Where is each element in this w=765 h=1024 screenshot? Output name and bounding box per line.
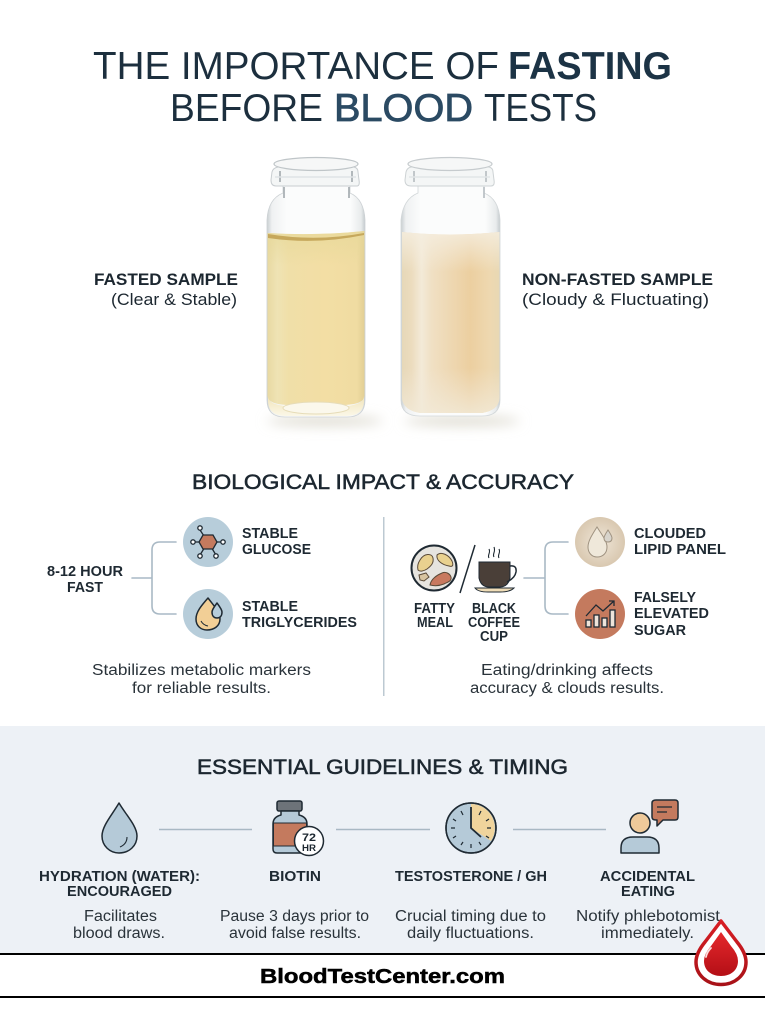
label: stable glucose <box>242 526 311 558</box>
label: black coffee cup: COFFEE <box>468 615 520 631</box>
label: fatty meal <box>414 601 455 631</box>
icon: biotin bottle: HR <box>302 843 316 854</box>
label: hydration: Facilitates <box>84 908 157 925</box>
logo: blood drop <box>696 921 746 984</box>
panel: essential guidelines <box>0 726 765 954</box>
label: accidental eating: Notify phlebotomist <box>576 908 721 925</box>
icon: black coffee cup <box>475 547 516 592</box>
label: fatty meal: MEAL <box>417 615 453 631</box>
text: stabilizes metabolic markers: Stabilizes metabolic markers <box>92 662 311 679</box>
label: hydration: ENCOURAGED <box>67 884 172 900</box>
icon: stable glucose <box>183 517 233 567</box>
label: 8-12 hour fast: 8-12 HOUR <box>47 564 124 580</box>
label: stable triglycerides <box>242 599 357 631</box>
icon: fatty meal plate <box>412 546 456 590</box>
label: fatty meal: FATTY <box>414 601 455 617</box>
label: fasted sample: (Clear & Stable) <box>111 291 237 309</box>
label: biotin <box>220 869 369 942</box>
connector: meal to outcomes <box>524 542 568 614</box>
title: THE IMPORTANCE OF <box>93 45 499 88</box>
label: stable triglycerides: TRIGLYCERIDES <box>242 615 357 631</box>
slash divider <box>460 545 475 593</box>
label: hydration <box>39 869 200 942</box>
label: 8-12 hour fast: FAST <box>67 580 103 596</box>
footer band: BloodTestCenter.com <box>260 966 505 988</box>
icon: person with speech bubble <box>621 800 678 853</box>
title: TESTS <box>484 87 597 130</box>
icon: falsely elevated sugar <box>575 589 625 639</box>
label: fasted sample: FASTED SAMPLE <box>94 271 238 289</box>
label: biotin: avoid false results. <box>229 925 361 942</box>
icon: water drop <box>102 803 137 853</box>
label: stable glucose: GLUCOSE <box>242 542 311 558</box>
label: accidental eating <box>576 869 721 942</box>
label: black coffee cup <box>468 601 520 645</box>
label: accidental eating: immediately. <box>601 925 694 942</box>
label: black coffee cup: BLACK <box>472 601 516 617</box>
label: biotin: Pause 3 days prior to <box>220 908 369 925</box>
label: non-fasted sample <box>522 271 713 309</box>
timeline connectors <box>159 828 606 830</box>
label: accidental eating: EATING <box>621 884 675 900</box>
label: falsely elevated sugar: FALSELY <box>634 590 696 606</box>
label: hydration: HYDRATION (WATER): <box>39 869 200 885</box>
label: testosterone and growth hormone: daily fluctuations. <box>407 925 534 942</box>
text: eating and drinking: Eating/drinking affects <box>481 662 653 679</box>
text: eating and drinking: accuracy & clouds results. <box>470 680 664 697</box>
label: clouded lipid panel: LIPID PANEL <box>634 542 726 558</box>
label: accidental eating: ACCIDENTAL <box>600 869 695 885</box>
label: stable triglycerides: STABLE <box>242 599 298 615</box>
icon: clouded lipid panel <box>575 517 625 567</box>
label: non-fasted sample: NON-FASTED SAMPLE <box>522 271 713 289</box>
label: 8-12 hour fast <box>47 564 124 596</box>
title: BEFORE <box>170 87 323 130</box>
text: eating and drinking <box>470 662 664 697</box>
label: testosterone and growth hormone: Crucial timing due to <box>395 908 546 925</box>
heading: biological impact: BIOLOGICAL IMPACT & ACCURACY <box>192 470 574 494</box>
text: stabilizes metabolic markers <box>92 662 311 697</box>
vial: non-fasted sample <box>401 158 520 426</box>
icon: biotin bottle <box>273 801 324 856</box>
label: clouded lipid panel: CLOUDED <box>634 526 706 542</box>
text: stabilizes metabolic markers: for reliable results. <box>132 680 271 697</box>
vial: fasted sample <box>267 158 383 426</box>
label: falsely elevated sugar: ELEVATED <box>634 606 709 622</box>
title: FASTING <box>508 45 672 88</box>
label: clouded lipid panel <box>634 526 726 558</box>
label: falsely elevated sugar <box>634 590 709 639</box>
title <box>93 45 672 130</box>
title: BLOOD <box>334 87 473 130</box>
label: black coffee cup: CUP <box>480 629 508 645</box>
label: testosterone and growth hormone: TESTOSTERONE / GH <box>395 869 547 885</box>
label: testosterone and growth hormone <box>395 869 547 942</box>
label: fasted sample <box>94 271 238 309</box>
label: falsely elevated sugar: SUGAR <box>634 623 687 639</box>
label: stable glucose: STABLE <box>242 526 298 542</box>
label: hydration: blood draws. <box>73 925 165 942</box>
icon: stable triglycerides <box>183 589 233 639</box>
icon: biotin bottle: 72 <box>302 832 316 844</box>
label: non-fasted sample: (Cloudy & Fluctuating) <box>522 291 709 309</box>
connector: fast to outcomes <box>132 542 176 614</box>
label: biotin: BIOTIN <box>269 869 321 885</box>
heading: essential guidelines: ESSENTIAL GUIDELINES & TIMING <box>197 755 568 779</box>
icon: clock <box>446 803 496 853</box>
